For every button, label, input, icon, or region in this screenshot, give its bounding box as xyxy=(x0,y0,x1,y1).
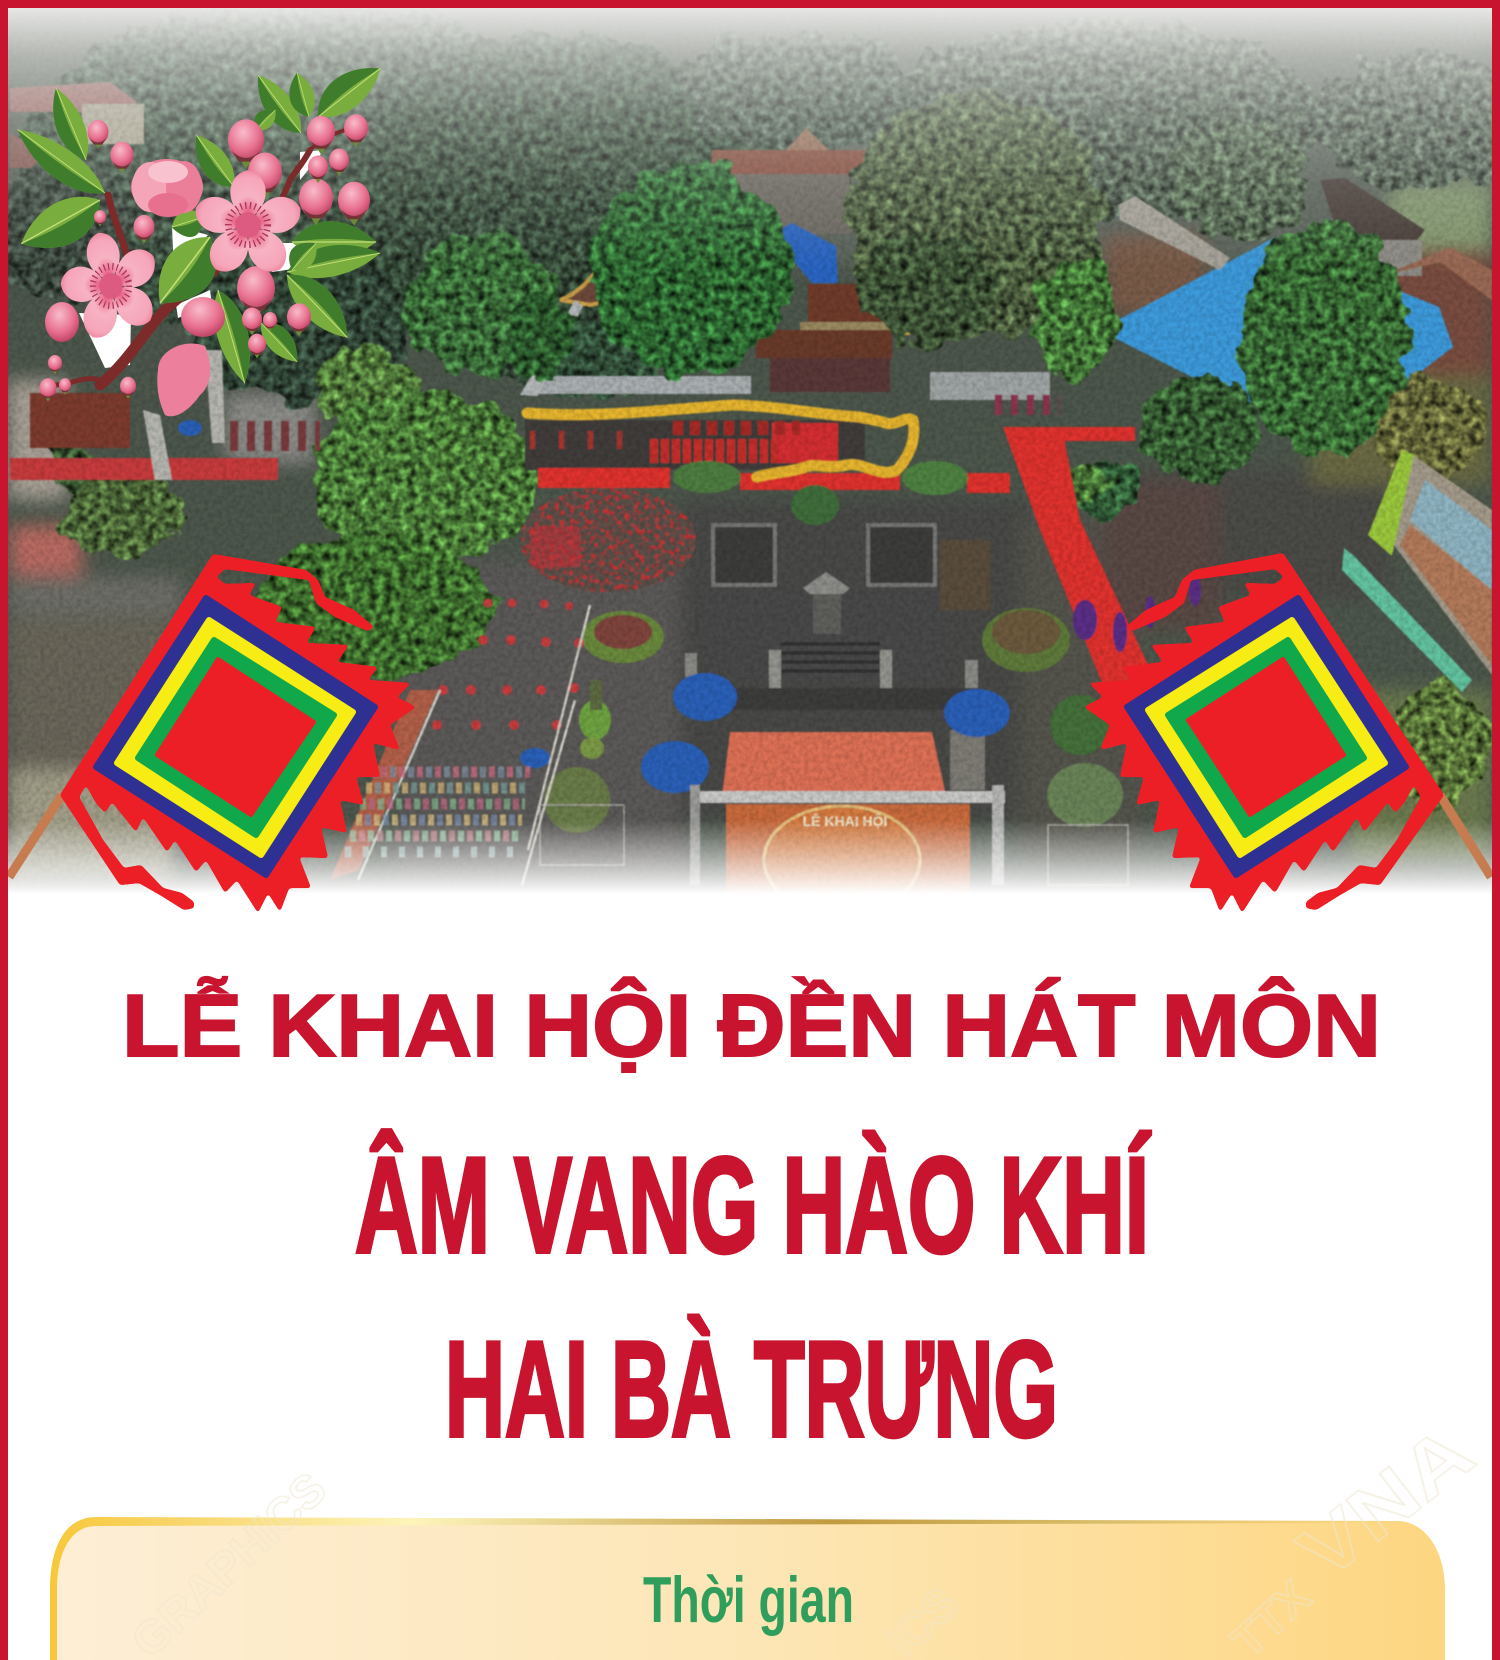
film grain over the photo xyxy=(8,8,1492,898)
branches xyxy=(55,130,345,385)
yellow dragon xyxy=(527,405,914,477)
flag blue band xyxy=(96,598,375,875)
right rope xyxy=(1440,795,1491,877)
watermark xyxy=(121,1409,1489,1660)
icon: peach blossom branch xyxy=(7,53,389,416)
coloured pennant flags xyxy=(345,772,530,852)
pink pavement strip xyxy=(330,690,438,880)
panel heading: Thời gian xyxy=(643,1563,854,1636)
large blossom left xyxy=(47,218,175,354)
buds xyxy=(228,119,264,169)
right houses xyxy=(1118,178,1492,300)
flag red centre xyxy=(1188,659,1344,815)
main temple hall roof xyxy=(712,128,872,234)
panel gold edge xyxy=(50,1517,1445,1660)
hero photo: aerial view of Hát Môn temple festival xyxy=(0,0,1500,914)
icon: right five-colour festival flag xyxy=(1084,553,1444,913)
performers in red xyxy=(30,393,1060,567)
title line 1: LỄ KHAI HỘI ĐỀN HÁT MÔN xyxy=(122,976,1381,1075)
pink flower bud right xyxy=(181,297,225,337)
large light-blue tarp xyxy=(1099,238,1453,403)
flag yellow band xyxy=(117,620,353,855)
courtyard bonsai and planters xyxy=(540,461,1128,885)
flag red centre xyxy=(157,659,314,815)
watermark: VNA xyxy=(1283,1409,1489,1596)
stage banner: LỄ KHAI HỘI xyxy=(803,812,887,829)
top fog xyxy=(8,8,1492,268)
title line 3: HAI BÀ TRƯNG xyxy=(445,1313,1058,1465)
stage banner xyxy=(726,804,970,914)
white cut-out patches xyxy=(79,150,324,368)
flag red fringe xyxy=(60,554,416,913)
flag green band xyxy=(138,640,334,835)
lower blossom xyxy=(157,343,210,416)
leaves xyxy=(306,53,389,129)
stage roof xyxy=(722,732,946,795)
panel: time section xyxy=(50,1517,1445,1660)
white gate posts xyxy=(143,350,225,480)
blue umbrellas xyxy=(178,420,1010,793)
temple wall fence xyxy=(536,376,751,394)
festival details on the ground xyxy=(10,350,1492,914)
icon: left five-colour festival flag xyxy=(60,554,416,913)
background forest xyxy=(0,0,1500,400)
pavement white lines xyxy=(358,605,590,885)
buildings in the background xyxy=(10,82,1492,403)
bottom fade to white xyxy=(8,820,1492,894)
large blossom centre xyxy=(190,170,306,280)
red carpets xyxy=(10,423,1160,690)
small blue tarp xyxy=(782,222,839,284)
pink flower bud left xyxy=(45,302,79,342)
panel fill xyxy=(57,1523,1445,1660)
flag blue band xyxy=(1127,598,1406,875)
purple-dressed performers xyxy=(1073,574,1201,652)
festival mural board xyxy=(1342,450,1492,692)
left houses xyxy=(10,82,144,168)
half-open blossom xyxy=(131,159,203,217)
photo base tone xyxy=(8,8,1492,898)
temple gate building xyxy=(756,275,910,392)
broad ground and forest tones xyxy=(8,113,1492,880)
flag red fringe xyxy=(1084,553,1444,913)
stone altar and gates xyxy=(685,525,990,790)
tree canopies xyxy=(50,93,1490,807)
flag yellow band xyxy=(1148,620,1385,855)
left rope xyxy=(9,795,62,877)
courtyard ground xyxy=(525,420,865,470)
stage truss xyxy=(700,791,1005,803)
red lanterns on pavement xyxy=(432,598,584,730)
left pagoda roof xyxy=(558,271,600,308)
red blossom tree xyxy=(520,488,696,592)
flag green band xyxy=(1168,640,1364,835)
